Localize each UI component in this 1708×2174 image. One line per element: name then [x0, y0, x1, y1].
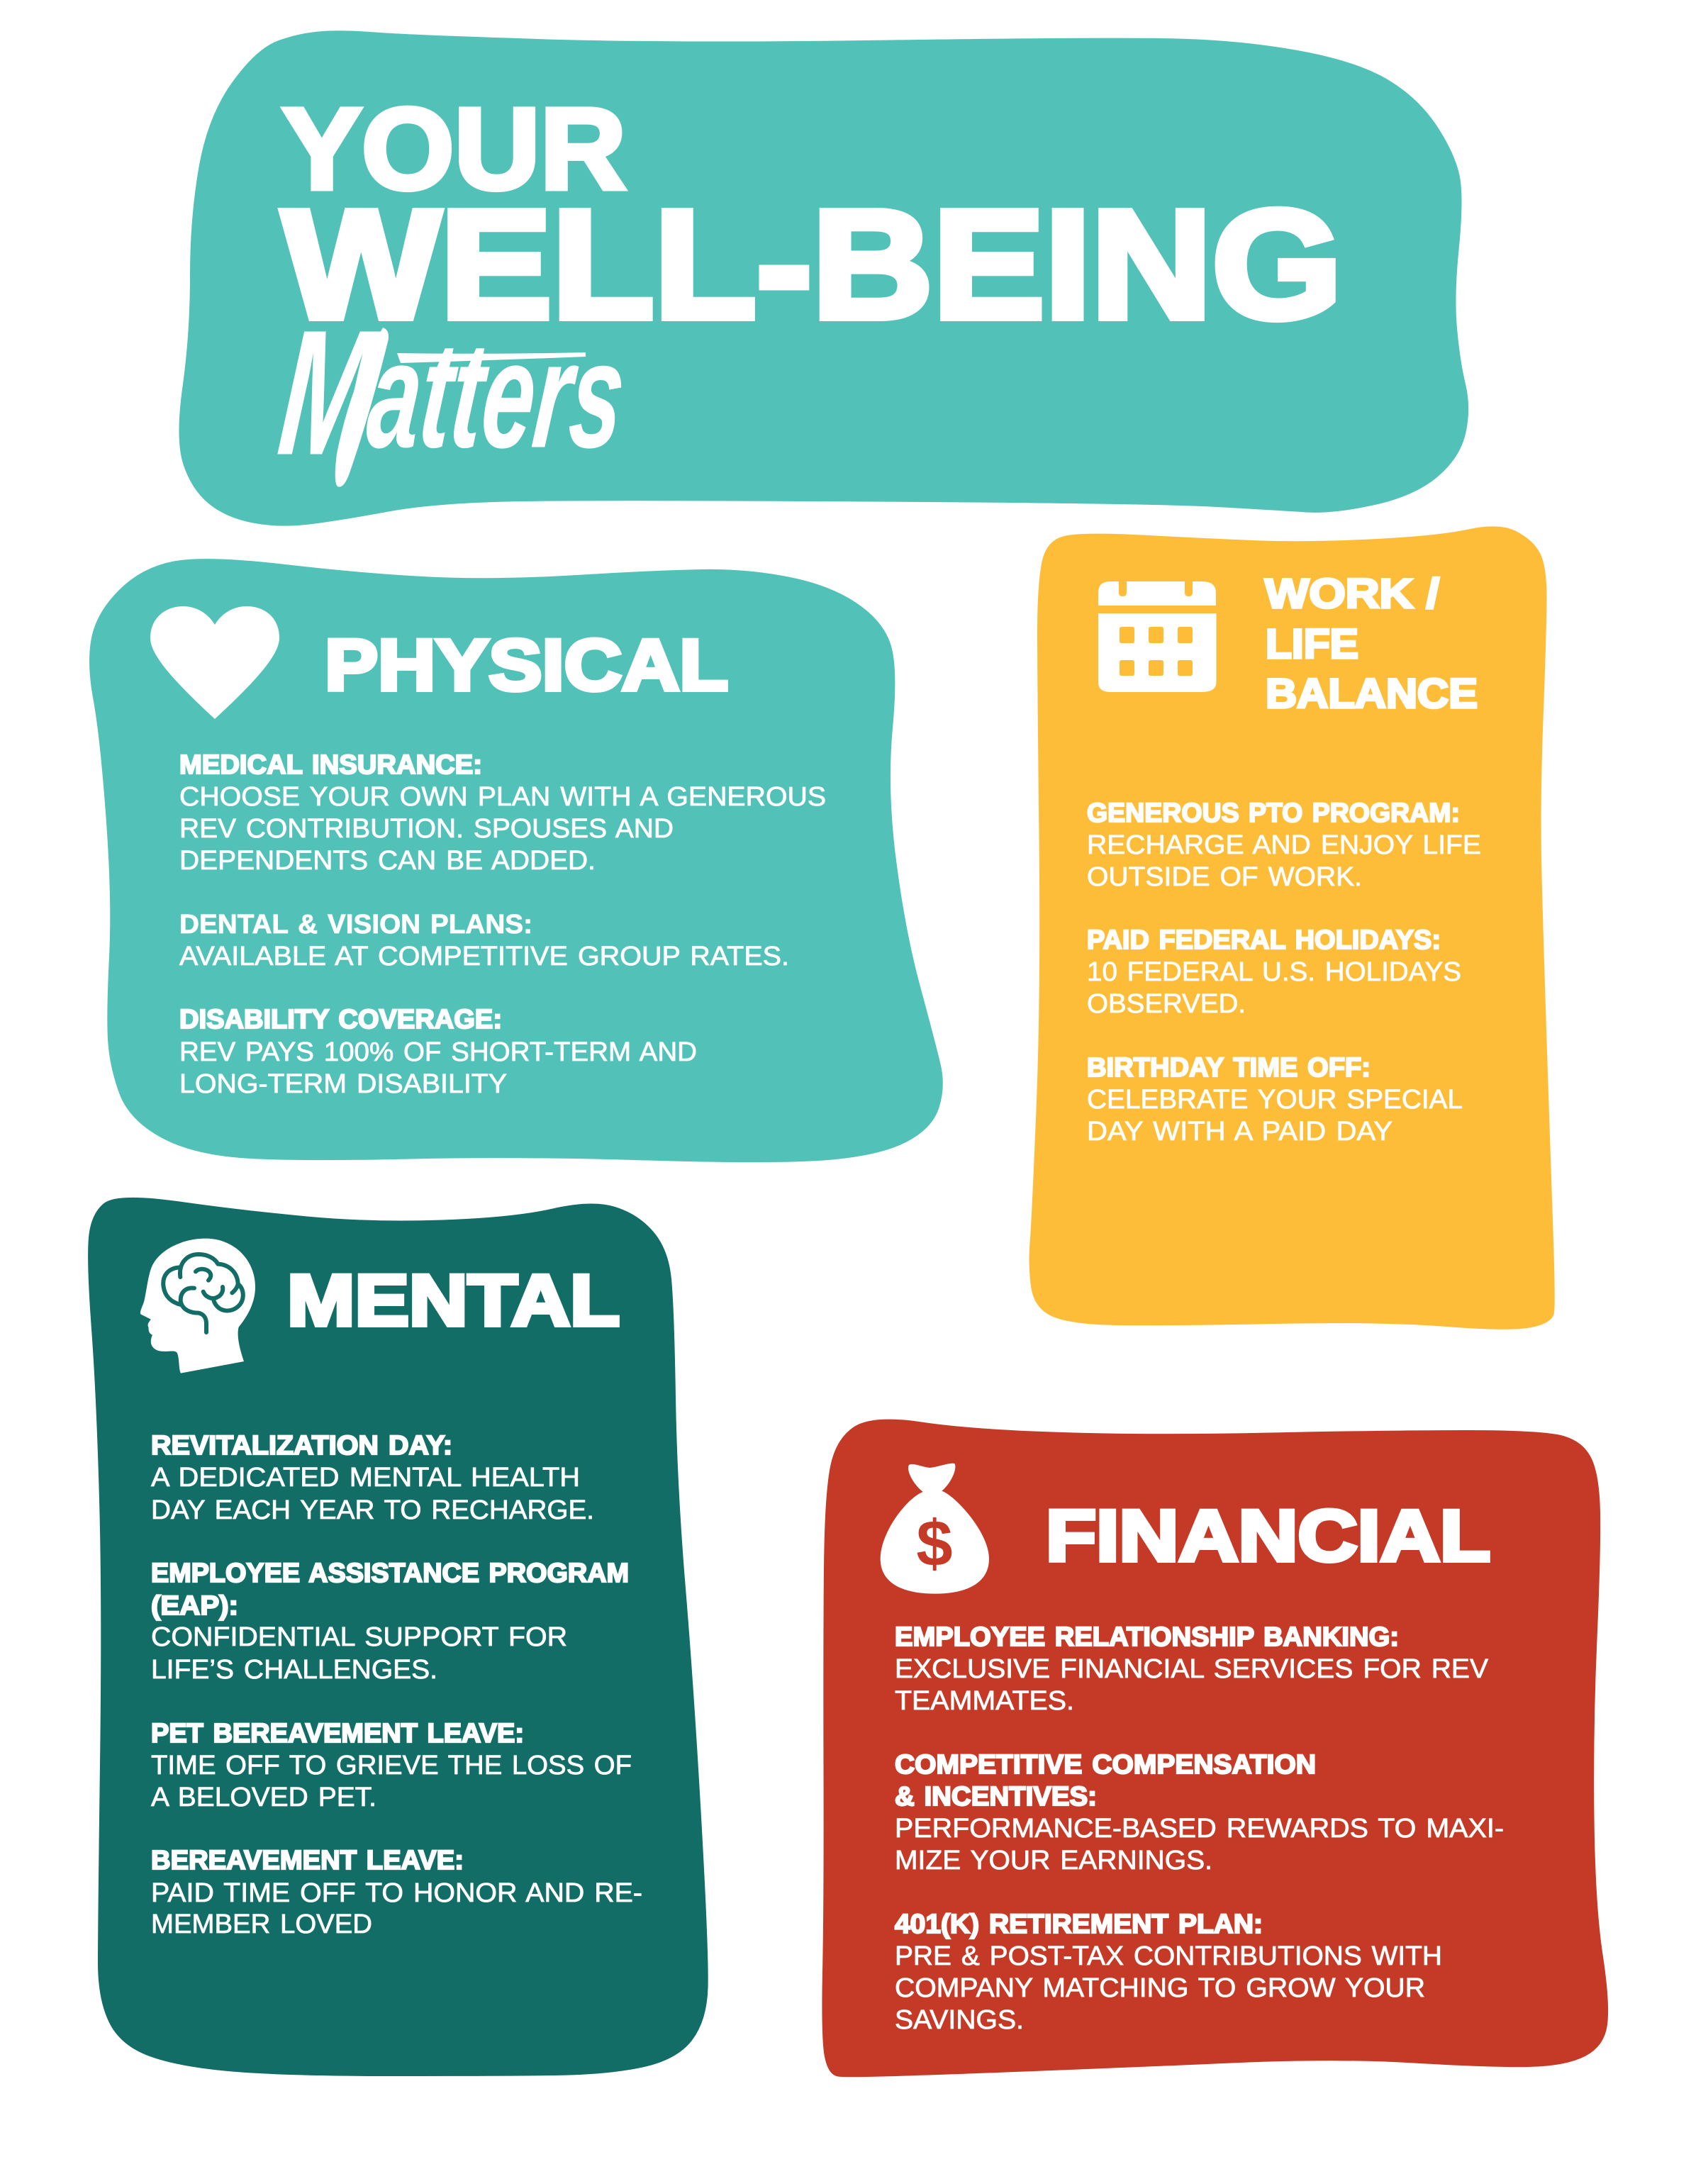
heading: financial: FINANCIAL: [1046, 1495, 1490, 1576]
panel: title banner: [179, 30, 1468, 526]
panel: mental: [88, 1198, 708, 2076]
heading: work / life balance: [1265, 571, 1478, 717]
benefit: medical insurance: CHOOSE YOUR OWN PLAN WITH A GENEROUS: [179, 782, 826, 812]
benefit: competitive compensation and incentives: COMPETITIVE COMPENSATION: [895, 1750, 1316, 1780]
benefit: bereavement leave: [151, 1846, 642, 1939]
benefit: medical insurance: MEDICAL INSURANCE:: [179, 750, 482, 780]
benefit: 401(k) retirement plan: [895, 1910, 1442, 2035]
benefit: pet bereavement leave: [151, 1719, 632, 1812]
benefit: employee assistance program: (EAP):: [151, 1591, 238, 1621]
title: Matters script: atters: [362, 311, 632, 479]
benefit: dental and vision: DENTAL & VISION PLANS:: [179, 910, 532, 940]
benefit: revitalization day: REVITALIZATION DAY:: [151, 1431, 452, 1461]
benefit: paid federal holidays: [1087, 925, 1461, 1019]
benefit: revitalization day: DAY EACH YEAR TO RECHARGE.: [151, 1495, 594, 1525]
benefit: employee assistance program: EMPLOYEE ASSISTANCE PROGRAM: [151, 1559, 629, 1588]
heading: work / life balance: WORK /: [1265, 571, 1439, 617]
benefit: medical insurance: REV CONTRIBUTION. SPOUSES AND: [179, 814, 674, 844]
benefit: 401(k) retirement plan: SAVINGS.: [895, 2005, 1024, 2035]
title: WELL-BEING: WELL-BEING: [282, 179, 1342, 351]
benefit: birthday time off: BIRTHDAY TIME OFF:: [1087, 1053, 1371, 1083]
benefit: bereavement leave: PAID TIME OFF TO HONOR AND RE-: [151, 1878, 642, 1908]
benefit: birthday time off: DAY WITH A PAID DAY: [1087, 1117, 1392, 1147]
benefit: competitive compensation and incentives: PERFORMANCE-BASED REWARDS TO MAXI-: [895, 1814, 1504, 1844]
benefit: bereavement leave: BEREAVEMENT LEAVE:: [151, 1846, 464, 1875]
benefit: revitalization day: A DEDICATED MENTAL HEALTH: [151, 1463, 580, 1493]
icon: money bag: $: [916, 1507, 953, 1580]
benefit: generous pto program: GENEROUS PTO PROGRAM:: [1087, 798, 1460, 828]
heading: work / life balance: LIFE: [1266, 621, 1358, 667]
title: YOUR: YOUR: [282, 84, 626, 213]
benefit: generous pto program: RECHARGE AND ENJOY LIFE: [1087, 830, 1481, 860]
benefit: 401(k) retirement plan: 401(K) RETIREMENT PLAN:: [895, 1910, 1263, 1939]
benefit: pet bereavement leave: PET BEREAVEMENT LEAVE:: [151, 1719, 524, 1749]
heading: mental: MENTAL: [287, 1260, 620, 1341]
benefit: pet bereavement leave: A BELOVED PET.: [151, 1783, 376, 1812]
benefit: birthday time off: CELEBRATE YOUR SPECIAL: [1087, 1085, 1463, 1115]
benefit: revitalization day: [151, 1431, 594, 1525]
title: Matters script: M: [272, 294, 385, 492]
heading: work / life balance: BALANCE: [1266, 671, 1478, 717]
panel: work life balance: [1029, 526, 1555, 1330]
benefit: disability coverage: LONG-TERM DISABILITY: [179, 1069, 507, 1099]
benefit: paid federal holidays: PAID FEDERAL HOLIDAYS:: [1087, 925, 1441, 955]
benefit: 401(k) retirement plan: PRE & POST-TAX CONTRIBUTIONS WITH: [895, 1941, 1442, 1971]
icon: heart: [150, 606, 279, 719]
benefit: paid federal holidays: 10 FEDERAL U.S. HOLIDAYS: [1087, 957, 1461, 987]
benefit: employee relationship banking: TEAMMATES.: [895, 1686, 1074, 1716]
benefit: competitive compensation and incentives: [895, 1750, 1504, 1875]
icon: calendar: [1098, 581, 1217, 692]
icon: head with brain: [140, 1239, 255, 1373]
benefit: birthday time off: [1087, 1053, 1463, 1147]
benefit: disability coverage: DISABILITY COVERAGE:: [179, 1005, 502, 1035]
benefit: generous pto program: OUTSIDE OF WORK.: [1087, 862, 1362, 892]
benefit: bereavement leave: MEMBER LOVED: [151, 1910, 372, 1939]
benefit: 401(k) retirement plan: COMPANY MATCHING TO GROW YOUR: [895, 1973, 1425, 2003]
icon: money bag: [881, 1464, 989, 1594]
benefit: competitive compensation and incentives: MIZE YOUR EARNINGS.: [895, 1846, 1212, 1875]
benefit: employee assistance program: CONFIDENTIAL SUPPORT FOR: [151, 1622, 567, 1652]
benefit: dental and vision: [179, 910, 789, 971]
panel: physical: [89, 559, 943, 1162]
benefit: disability coverage: REV PAYS 100% OF SHORT-TERM AND: [179, 1037, 697, 1067]
benefit: generous pto program: [1087, 798, 1481, 892]
heading: physical: PHYSICAL: [325, 625, 728, 706]
benefit: employee relationship banking: [895, 1622, 1489, 1716]
benefit: medical insurance: DEPENDENTS CAN BE ADDED.: [179, 846, 596, 876]
benefit: employee relationship banking: EXCLUSIVE FINANCIAL SERVICES FOR REV: [895, 1654, 1489, 1684]
benefit: employee assistance program: LIFE’S CHALLENGES.: [151, 1655, 437, 1685]
benefit: competitive compensation and incentives: & INCENTIVES:: [895, 1782, 1097, 1812]
benefit: dental and vision: AVAILABLE AT COMPETITIVE GROUP RATES.: [179, 942, 789, 971]
panel: financial: [822, 1420, 1608, 2077]
title: Matters script: [272, 294, 633, 492]
benefit: paid federal holidays: OBSERVED.: [1087, 989, 1246, 1019]
benefit: pet bereavement leave: TIME OFF TO GRIEVE THE LOSS OF: [151, 1751, 632, 1780]
benefit: employee relationship banking: EMPLOYEE RELATIONSHIP BANKING:: [895, 1622, 1399, 1652]
benefit: medical insurance: [179, 750, 826, 876]
benefit: disability coverage: [179, 1005, 697, 1099]
benefit: employee assistance program: [151, 1559, 629, 1685]
